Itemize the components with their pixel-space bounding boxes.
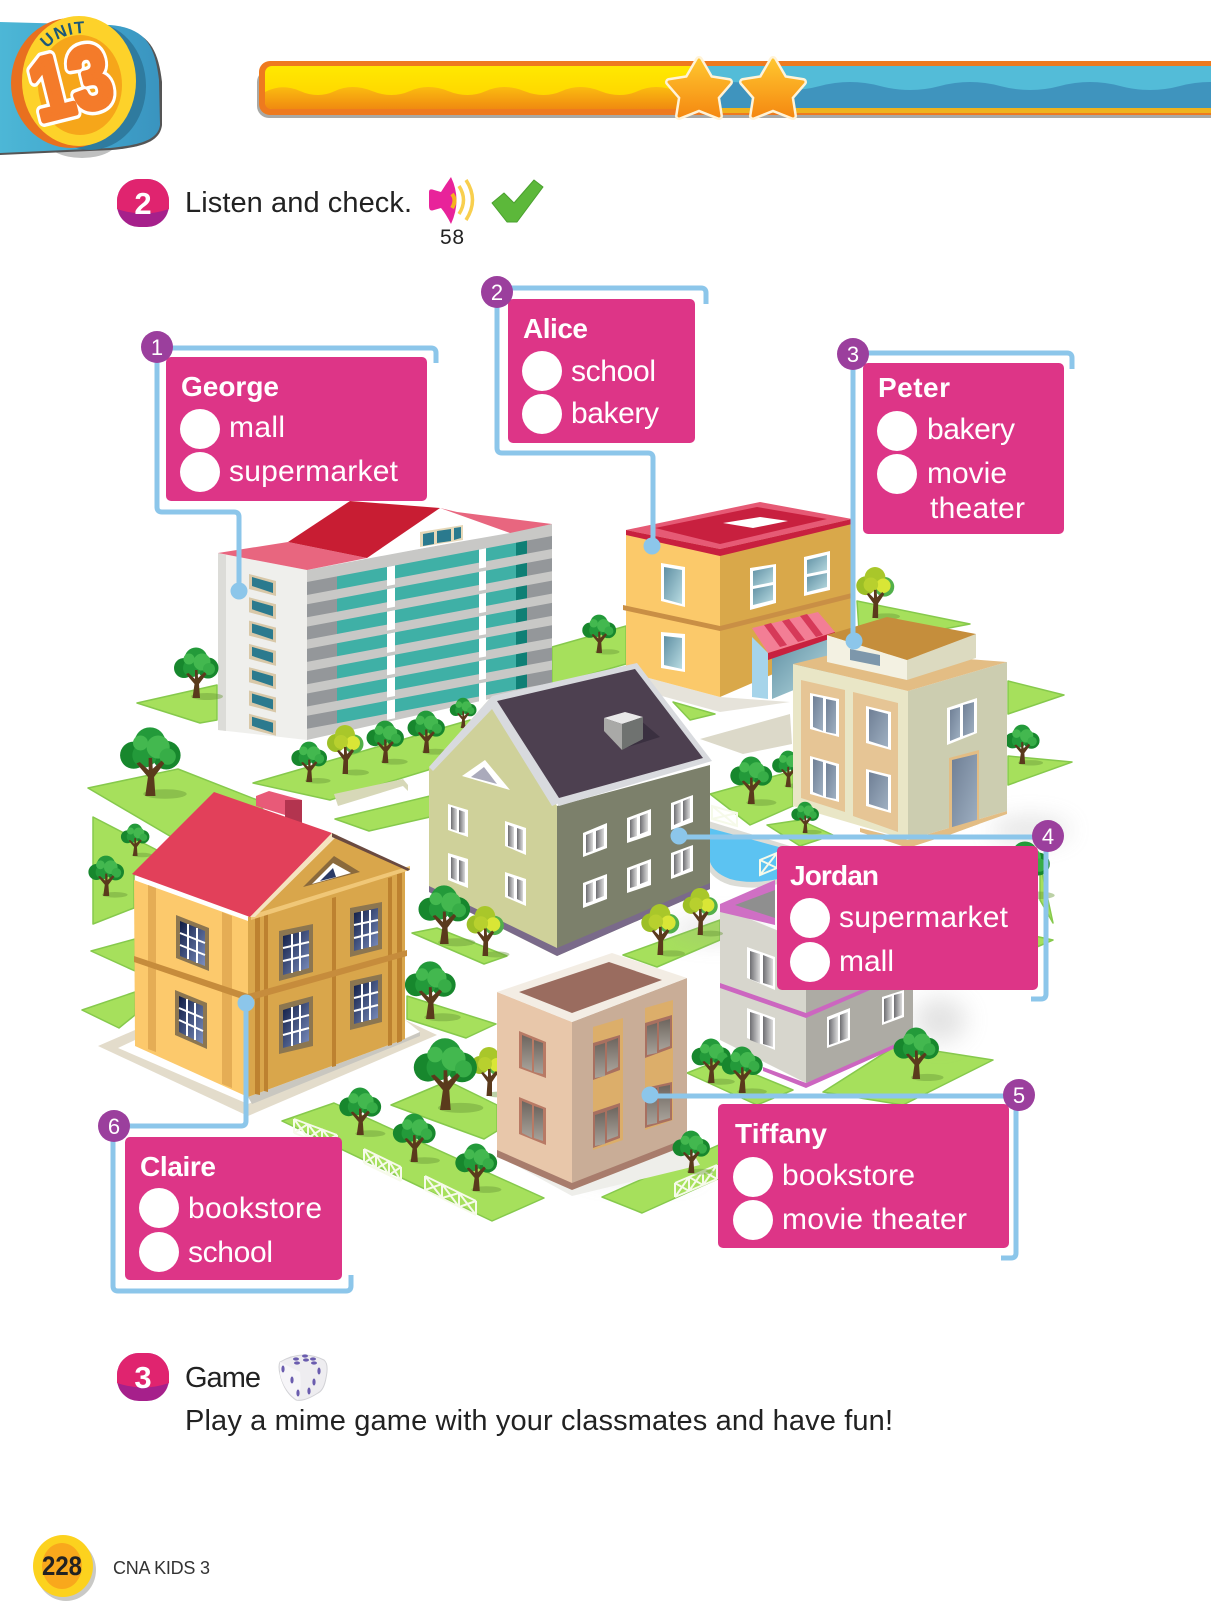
number badge <box>1032 820 1064 852</box>
name: Alice <box>523 313 588 344</box>
building: orange bakery <box>623 502 852 712</box>
option: supermarket <box>790 898 1009 938</box>
number badge <box>141 331 173 363</box>
unit number: 13 <box>20 25 121 140</box>
answer box <box>718 1104 1009 1248</box>
connector <box>650 1096 1016 1258</box>
building: grey supermarket with pink trim <box>720 880 913 1088</box>
game title: Game <box>185 1362 261 1394</box>
option: bookstore <box>733 1157 915 1197</box>
option: mall <box>180 409 285 449</box>
pointer dot <box>670 828 688 844</box>
number badge: 5 <box>1013 1083 1025 1108</box>
option: bookstore: bookstore <box>188 1192 322 1225</box>
option: movie theater <box>877 454 1025 525</box>
icon: check mark <box>492 180 543 222</box>
pointer dot <box>642 1086 658 1104</box>
trees: behind centre house <box>88 567 1055 899</box>
option: mall: mall <box>839 945 894 978</box>
section number 3: 3 <box>134 1360 152 1395</box>
connector <box>853 353 1072 640</box>
pointer dot <box>644 538 660 554</box>
garden fences <box>294 1119 717 1215</box>
unit 13 badge <box>0 16 162 158</box>
icon: speaker <box>429 177 472 224</box>
building: olive house <box>429 663 712 956</box>
number badge <box>98 1110 130 1142</box>
connector <box>157 348 436 592</box>
option: supermarket <box>180 452 399 492</box>
building: beige cinema <box>793 617 1007 848</box>
audio track number: 58 <box>440 226 464 249</box>
building: apartment block <box>218 501 552 740</box>
soft building shadows <box>580 818 1070 1180</box>
instruction text: Listen and check. <box>185 187 412 219</box>
connector <box>113 1004 351 1291</box>
isometric town illustration <box>82 501 1072 1221</box>
unit label: UNIT <box>40 21 84 46</box>
option: supermarket: supermarket <box>839 901 1009 934</box>
trees: middle row <box>405 802 944 1113</box>
number badge: 4 <box>1042 824 1054 849</box>
heading: game <box>117 1353 893 1437</box>
building: yellow bookstore <box>98 791 437 1116</box>
callout 6: Claire <box>98 994 351 1291</box>
number badge: 1 <box>151 335 163 360</box>
name: Peter <box>878 372 950 403</box>
callout 1: George <box>141 331 436 600</box>
tree by school <box>673 1131 714 1175</box>
swimming pool <box>705 806 790 888</box>
icon: dice <box>279 1354 327 1400</box>
connector <box>679 837 1046 999</box>
section number 2 <box>117 179 169 227</box>
option: school: school <box>571 355 656 388</box>
name: Tiffany <box>735 1118 827 1149</box>
callout 3: Peter <box>837 338 1072 650</box>
progress bar with stars <box>257 60 1211 118</box>
option: bakery: bakery <box>571 397 659 430</box>
pointer dot <box>238 994 254 1012</box>
option: movie theater: movie theater <box>782 1203 967 1236</box>
name: Jordan <box>790 860 879 891</box>
option: movie theater: movie <box>927 457 1007 490</box>
section number 3 <box>117 1353 169 1401</box>
star 2 <box>743 60 803 116</box>
answer box <box>777 846 1038 990</box>
option: mall <box>790 942 894 982</box>
option: movie theater: theater <box>930 492 1025 525</box>
name: Claire <box>140 1151 216 1182</box>
callout 2: Alice <box>481 276 706 554</box>
unit number outline: 13 <box>20 25 121 140</box>
callout 4: Jordan <box>670 820 1064 999</box>
pointer dot <box>846 632 862 650</box>
number badge: 2 <box>491 280 503 305</box>
answer box <box>863 363 1064 534</box>
option: bakery: bakery <box>927 413 1015 446</box>
game instruction: Play a mime game with your classmates and have fun! <box>185 1405 893 1437</box>
number badge: 3 <box>847 342 859 367</box>
number badge: 6 <box>108 1114 120 1139</box>
option: bakery <box>877 411 1015 451</box>
pavement and bench <box>334 714 792 806</box>
star 1 <box>669 60 729 116</box>
grass patches <box>82 601 1072 1221</box>
number badge <box>1003 1079 1035 1111</box>
option: supermarket: supermarket <box>229 455 399 488</box>
trees: foreground row <box>339 1088 501 1193</box>
footer label: CNA KIDS 3 <box>113 1558 210 1578</box>
option: school <box>139 1232 273 1272</box>
connector <box>497 288 706 546</box>
answer box <box>125 1137 342 1280</box>
option: bookstore <box>139 1188 322 1228</box>
number badge <box>837 338 869 370</box>
callout 5: Tiffany <box>642 1079 1035 1258</box>
answer box <box>166 357 427 501</box>
answer box <box>508 299 695 443</box>
page number coin <box>33 1535 96 1601</box>
option: bakery <box>522 394 659 434</box>
option: school <box>522 351 656 391</box>
option: movie theater <box>733 1200 967 1240</box>
page number coin: 228 <box>42 1551 82 1581</box>
option: bookstore: bookstore <box>782 1159 915 1192</box>
option: mall: mall <box>229 411 285 444</box>
option: school: school <box>188 1236 273 1269</box>
heading: listen and check <box>117 177 543 249</box>
pointer dot <box>230 582 248 600</box>
number badge <box>481 276 513 308</box>
section number 2: 2 <box>134 186 152 221</box>
name: George <box>181 371 279 402</box>
building: peach school <box>497 953 700 1196</box>
grass patch by school <box>602 1140 760 1213</box>
